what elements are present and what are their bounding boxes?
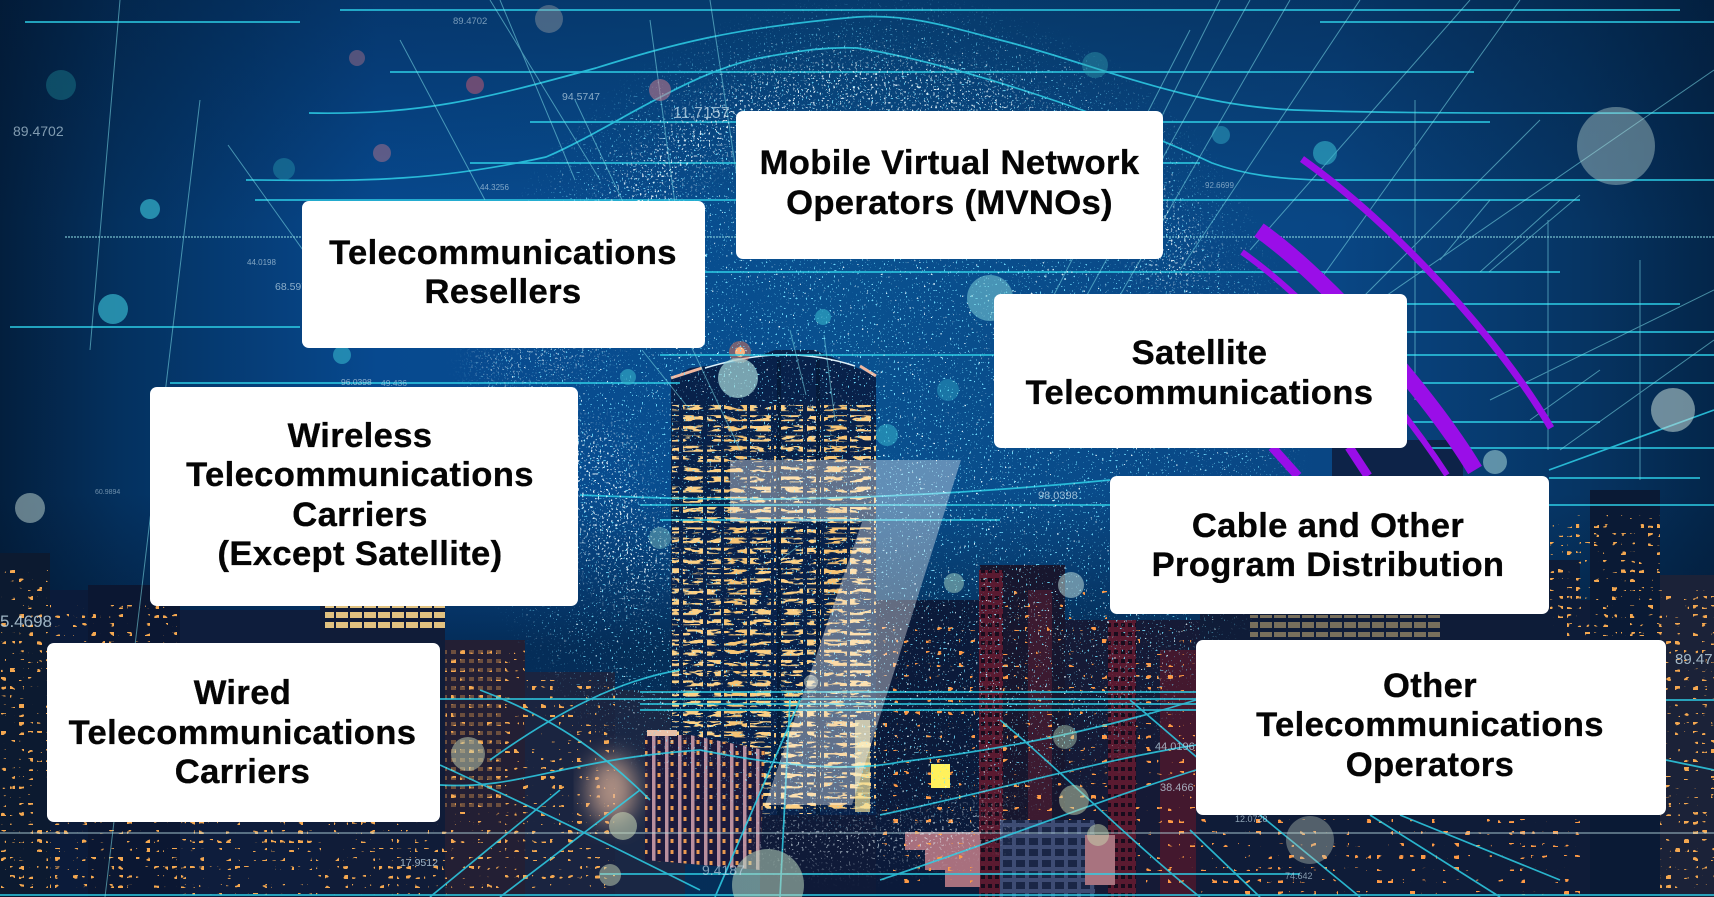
decorative data numbers: 89.4702 xyxy=(453,16,487,27)
decorative data numbers: 44.0196 xyxy=(1155,741,1195,753)
panel: Wired Telecommunications Carriers: Wired xyxy=(194,674,291,712)
panel: Other Telecommunications Operators xyxy=(1196,640,1666,815)
decorative data numbers: 17.9512 xyxy=(400,857,438,869)
red high-rise towers and grey lowrise xyxy=(905,570,1196,897)
decorative data numbers: 89.4702 xyxy=(13,123,64,139)
decorative data numbers: 44.0198 xyxy=(247,258,276,267)
decorative data numbers: 60.9894 xyxy=(95,489,120,496)
decorative data numbers: 96.0398 xyxy=(341,377,372,387)
purple arcs xyxy=(1242,159,1551,476)
city skyline silhouettes xyxy=(0,440,1714,897)
panel: Mobile Virtual Network Operators xyxy=(736,111,1163,259)
panel: Wired Telecommunications Carriers: Carriers xyxy=(175,753,310,791)
decorative data numbers: 38.466 xyxy=(1160,782,1194,794)
lit building rows left xyxy=(325,606,1440,810)
decorative data numbers: 49.436 xyxy=(381,378,407,388)
central tower xyxy=(671,341,876,815)
panel: Telecommunications Resellers: Resellers xyxy=(425,273,581,311)
panel: Wireless Telecommunications Carriers: Carriers xyxy=(292,496,428,534)
panel: Mobile Virtual Network Operators: Operators (MVNOs) xyxy=(786,184,1113,222)
decorative data numbers: 9.4187 xyxy=(702,862,745,878)
decorative data numbers: 44.3256 xyxy=(480,183,509,192)
panel: Cable and Other Program Distribution: Program Distribution xyxy=(1152,546,1504,584)
panel: Satellite Telecommunications: Telecommunications xyxy=(1026,374,1373,412)
dashed horizontal data line xyxy=(65,236,1714,238)
panel: Satellite Telecommunications: Satellite xyxy=(1132,334,1267,372)
decorative data numbers: 12.0728 xyxy=(1235,814,1268,824)
panel: Satellite Telecommunications xyxy=(994,294,1407,448)
panel: Telecommunications Resellers: Telecommunications xyxy=(329,234,677,272)
particle globe xyxy=(457,0,1302,882)
decorative data numbers: 5.4698 xyxy=(0,612,52,631)
decorative data numbers: 11.7157 xyxy=(673,105,730,122)
panel: Wired Telecommunications Carriers xyxy=(47,643,440,822)
panel: Wireless Telecommunications Carriers: Telecommunications xyxy=(186,456,534,494)
panel: Mobile Virtual Network Operators: Mobile Virtual Network xyxy=(760,144,1139,182)
panel: Other Telecommunications Operators: Other xyxy=(1383,667,1477,705)
decorative data numbers: 89.47 xyxy=(1675,651,1713,668)
panel: Wireless Telecommunications Carriers: (Except Satellite) xyxy=(218,535,502,573)
panel: Cable and Other Program Distribution xyxy=(1110,476,1549,614)
decorative data numbers: 94.5747 xyxy=(562,91,600,103)
decorative data numbers: 68.597 xyxy=(275,281,307,293)
city windows xyxy=(0,510,1714,895)
pink hotel building xyxy=(645,730,765,870)
panel: Wireless Telecommunications Carriers: Wireless xyxy=(288,417,432,455)
panel: Other Telecommunications Operators: Operators xyxy=(1346,746,1514,784)
panel: Wireless Telecommunications Carriers xyxy=(150,387,578,606)
decorative data numbers: 98.0398 xyxy=(1038,490,1078,502)
decorative data numbers: 92.6699 xyxy=(1205,181,1234,190)
panel: Telecommunications Resellers xyxy=(302,201,705,348)
panel: Cable and Other Program Distribution: Cable and Other xyxy=(1192,507,1464,545)
decorative data numbers: 74.642 xyxy=(1285,871,1313,881)
peach smoke glow xyxy=(588,756,636,824)
panel: Wired Telecommunications Carriers: Telecommunications xyxy=(69,714,416,752)
panel: Other Telecommunications Operators: Telecommunications xyxy=(1256,706,1604,744)
translucent white seven logo xyxy=(730,460,961,805)
